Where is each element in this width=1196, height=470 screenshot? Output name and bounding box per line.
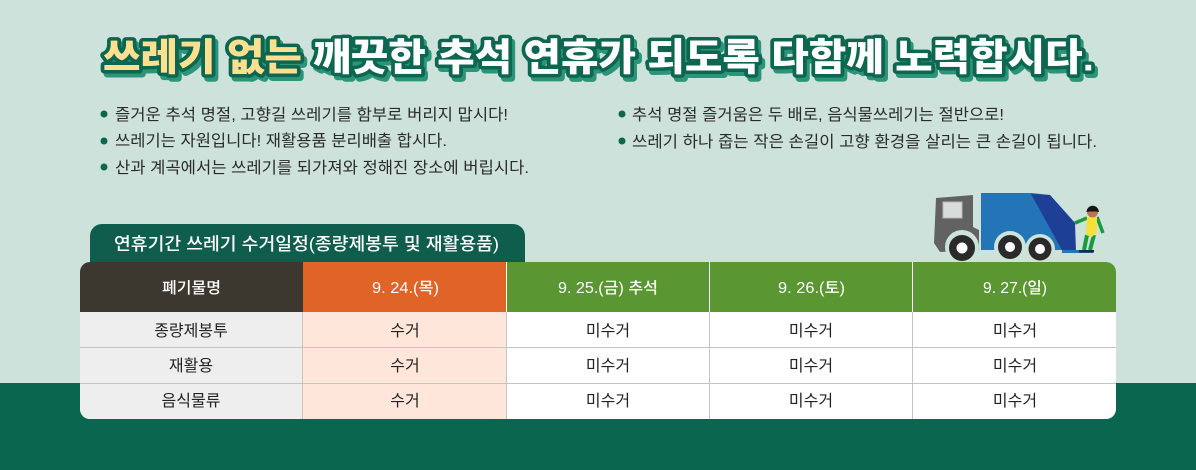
header: waste type: 폐기물명 <box>162 279 221 297</box>
header: Sept 27: 9. 27.(일) <box>983 279 1047 297</box>
header: Sept 26: 9. 26.(토) <box>778 280 845 297</box>
row: recyclables <box>169 357 1037 375</box>
row: food waste: 음식물류 <box>162 392 220 410</box>
heading tab: collection schedule: 연휴기간 쓰레기 수거일정(종량제봉투 및 재활용품) <box>114 234 499 254</box>
header: Sept 24: 9. 24.(목) <box>372 280 439 297</box>
text block: right guidelines <box>618 106 1097 151</box>
row: recyclables: 수거 <box>390 357 420 375</box>
first column background <box>80 312 302 419</box>
icon: garbage truck with worker <box>934 193 1103 264</box>
header: Sept 25 <box>507 262 709 312</box>
text block: left guidelines <box>100 106 529 177</box>
text block: right guidelines: 추석 명절 즐거움은 두 배로, 음식물쓰레기는 절반으로! <box>632 106 1004 124</box>
row: general waste bags: 미수거 <box>586 322 630 340</box>
text block: left guidelines: 쓰레기는 자원입니다! 재활용품 분리배출 합시다. <box>115 132 447 150</box>
row: general waste bags: 미수거 <box>789 322 833 340</box>
row: general waste bags: 미수거 <box>993 322 1037 340</box>
row: food waste: 미수거 <box>789 392 833 410</box>
text block: right guidelines: 쓰레기 하나 줍는 작은 손길이 고향 환경을 살리는 큰 손길이 됩니다. <box>632 133 1097 151</box>
table: collection schedule <box>80 262 1116 419</box>
header: Sept 25: 9. 25.(금) 추석 <box>558 279 658 297</box>
row: food waste <box>162 392 1037 410</box>
text block: left guidelines: 즐거운 추석 명절, 고향길 쓰레기를 함부로 버리지 맙시다! <box>115 106 508 124</box>
row: recyclables: 미수거 <box>993 357 1037 375</box>
row: food waste: 수거 <box>390 392 420 410</box>
row: general waste bags: 종량제봉투 <box>154 322 228 340</box>
row: food waste: 미수거 <box>586 392 630 410</box>
header: waste type <box>80 262 303 312</box>
row: general waste bags: 수거 <box>390 322 420 340</box>
row: recyclables: 재활용 <box>169 357 213 375</box>
heading tab: collection schedule <box>90 224 525 264</box>
row: recyclables: 미수거 <box>789 357 833 375</box>
row: general waste bags <box>154 322 1037 340</box>
row: food waste: 미수거 <box>993 392 1037 410</box>
title: 쓰레기 없는 깨끗한 추석 연휴가 되도록 다함께 노력합시다. <box>103 38 1094 80</box>
text block: left guidelines: 산과 계곡에서는 쓰레기를 되가져와 정해진 장소에 버립시다. <box>115 159 529 177</box>
header: Sept 24 <box>303 262 506 312</box>
header: Sept 27 <box>913 262 1116 312</box>
row: recyclables: 미수거 <box>586 357 630 375</box>
header: Sept 26 <box>710 262 912 312</box>
collected column background <box>303 312 506 419</box>
